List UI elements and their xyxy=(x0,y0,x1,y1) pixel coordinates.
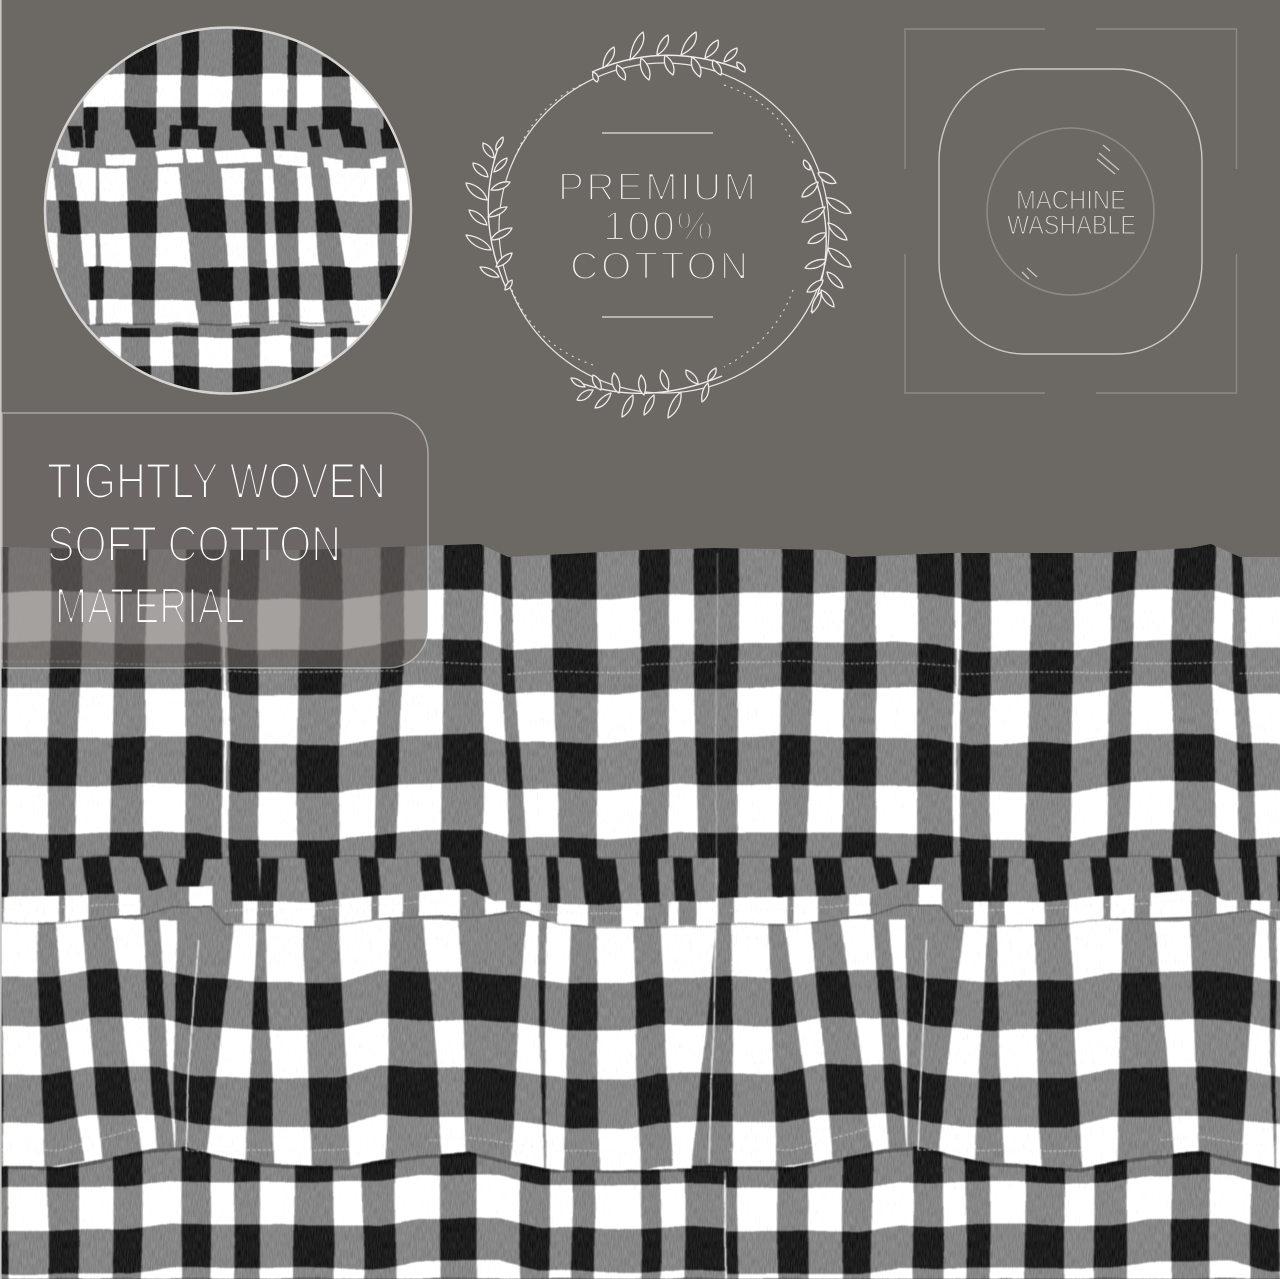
top branch xyxy=(593,32,745,82)
badge text xyxy=(558,166,756,288)
badge text: 100% xyxy=(603,203,713,249)
washable text xyxy=(1007,185,1136,240)
bottom branch xyxy=(571,368,716,418)
glint marks xyxy=(1022,145,1119,279)
crop-mark frame xyxy=(905,29,1236,393)
badge: premium 100% cotton wreath xyxy=(466,32,851,418)
washable text: WASHABLE xyxy=(1007,210,1136,240)
bottom divider xyxy=(602,316,713,318)
wreath rings xyxy=(499,63,829,393)
inner circle xyxy=(987,128,1154,295)
photo: black and white buffalo check ruffled curtains xyxy=(0,346,1280,1279)
left branch xyxy=(466,137,512,290)
rounded square outline xyxy=(939,69,1202,354)
translucent panel xyxy=(2,413,428,668)
badge text: COTTON xyxy=(570,245,748,288)
badge text: PREMIUM xyxy=(558,166,756,209)
left edge strip xyxy=(0,0,2,1279)
callout text: TIGHTLY WOVEN xyxy=(47,453,386,509)
callout text xyxy=(47,453,386,634)
callout: tightly woven soft cotton material xyxy=(2,413,428,668)
inset: close-up photo of ruffle xyxy=(44,26,412,395)
badge: machine washable xyxy=(905,29,1236,393)
laurel branches xyxy=(466,32,851,418)
right branch xyxy=(802,160,851,313)
inset ring xyxy=(45,28,411,394)
washable text: MACHINE xyxy=(1016,185,1126,215)
callout text: SOFT COTTON xyxy=(47,516,341,572)
top divider xyxy=(602,132,713,134)
callout text: MATERIAL xyxy=(55,578,245,634)
